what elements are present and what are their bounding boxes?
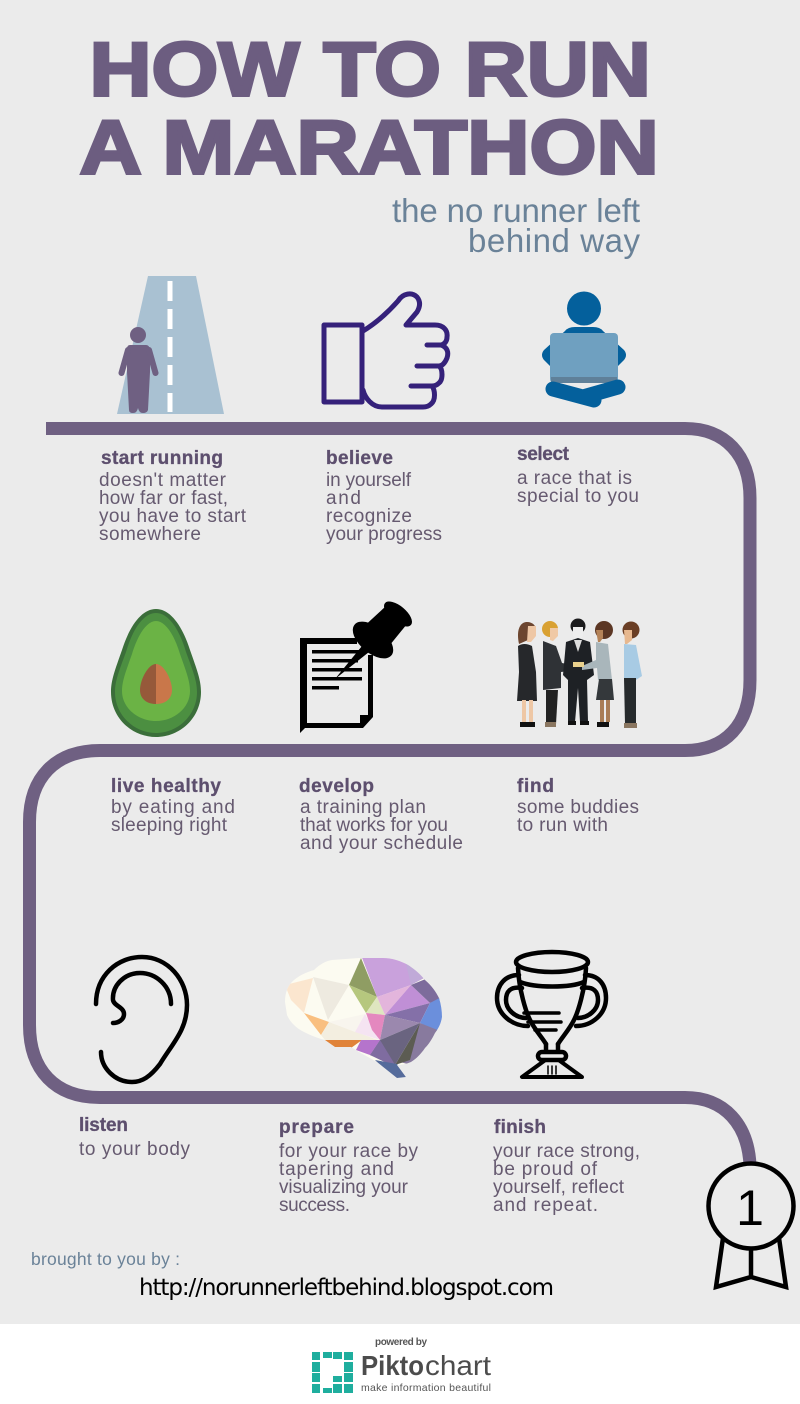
step: believe: believe	[326, 448, 393, 469]
step: finish: your race strong,	[493, 1141, 640, 1162]
step: find	[517, 776, 639, 836]
step: start running: you have to start	[99, 506, 247, 527]
step: believe: in yourself	[326, 470, 412, 491]
winding road path	[30, 428, 750, 1165]
step: prepare: prepare	[279, 1117, 354, 1138]
piktochart logo: make information beautiful	[361, 1382, 491, 1394]
step: live healthy: by eating and	[111, 797, 235, 818]
icon: first place ribbon: 1	[736, 1180, 764, 1236]
step: believe: and	[326, 488, 361, 509]
step: prepare	[279, 1117, 418, 1216]
person 1	[517, 622, 537, 727]
step: listen: listen	[79, 1115, 128, 1136]
icon: avocado	[111, 609, 201, 737]
step: listen: to your body	[79, 1139, 190, 1160]
piktochart logo: chart	[425, 1351, 491, 1382]
step: believe: your progress	[326, 524, 442, 545]
step: develop: and your schedule	[300, 833, 463, 854]
step: find: find	[517, 776, 554, 797]
step: develop	[299, 776, 463, 854]
credit text: brought to you by :	[31, 1249, 180, 1269]
icon: trophy	[497, 952, 606, 1077]
icon: first place ribbon	[708, 1164, 794, 1287]
icon: thumbs up	[324, 294, 448, 407]
step: select	[517, 444, 639, 507]
step: prepare: success.	[279, 1195, 350, 1216]
step: develop: that works for you	[300, 815, 448, 836]
icon: team of business people	[517, 618, 642, 728]
step: believe	[326, 448, 442, 545]
step: finish: finish	[494, 1117, 546, 1138]
title: A MARATHON	[80, 105, 659, 190]
step: live healthy: live healthy	[111, 776, 221, 797]
website link: http://norunnerleftbehind.blogspot.com	[139, 1275, 554, 1301]
icon: pinned document	[300, 597, 416, 733]
step: prepare: visualizing your	[279, 1177, 409, 1198]
icon: road and runner	[117, 276, 224, 414]
step: believe: recognize	[326, 506, 412, 527]
step: finish	[493, 1117, 640, 1216]
step: develop: a training plan	[300, 797, 426, 818]
piktochart logo: Pikto	[361, 1350, 424, 1381]
step: finish: and repeat.	[493, 1195, 598, 1216]
icon: low-poly brain	[285, 958, 442, 1078]
person 4	[582, 621, 614, 727]
step: select: select	[517, 444, 570, 465]
step: prepare: tapering and	[279, 1159, 394, 1180]
step: find: some buddies	[517, 797, 639, 818]
step: live healthy: sleeping right	[111, 815, 228, 836]
step: start running: somewhere	[99, 524, 201, 545]
icon: person with laptop	[542, 292, 626, 400]
person 2	[542, 621, 578, 727]
footer band	[0, 1324, 800, 1404]
subtitle: the no runner left	[392, 192, 640, 229]
step: finish: yourself, reflect	[493, 1177, 625, 1198]
subtitle: behind way	[468, 222, 640, 259]
icon: ear	[96, 957, 187, 1082]
step: select: special to you	[517, 486, 639, 507]
person 5	[622, 622, 642, 728]
title: HOW TO RUN	[90, 28, 651, 112]
step: listen	[79, 1115, 190, 1160]
subtitle	[392, 192, 640, 259]
step: develop: develop	[299, 776, 374, 797]
step: start running: doesn't matter	[99, 470, 227, 491]
person 3	[563, 618, 594, 725]
step: finish: be proud of	[493, 1159, 598, 1180]
step: find: to run with	[517, 815, 608, 836]
step: live healthy	[111, 776, 235, 836]
step: start running: how far or fast,	[99, 488, 228, 509]
step: prepare: for your race by	[279, 1141, 418, 1162]
piktochart logo	[312, 1350, 491, 1394]
title	[80, 28, 659, 190]
step: start running	[99, 448, 247, 545]
step: start running: start running	[101, 448, 223, 469]
step: select: a race that is	[517, 468, 632, 489]
powered by text: powered by	[375, 1337, 427, 1348]
